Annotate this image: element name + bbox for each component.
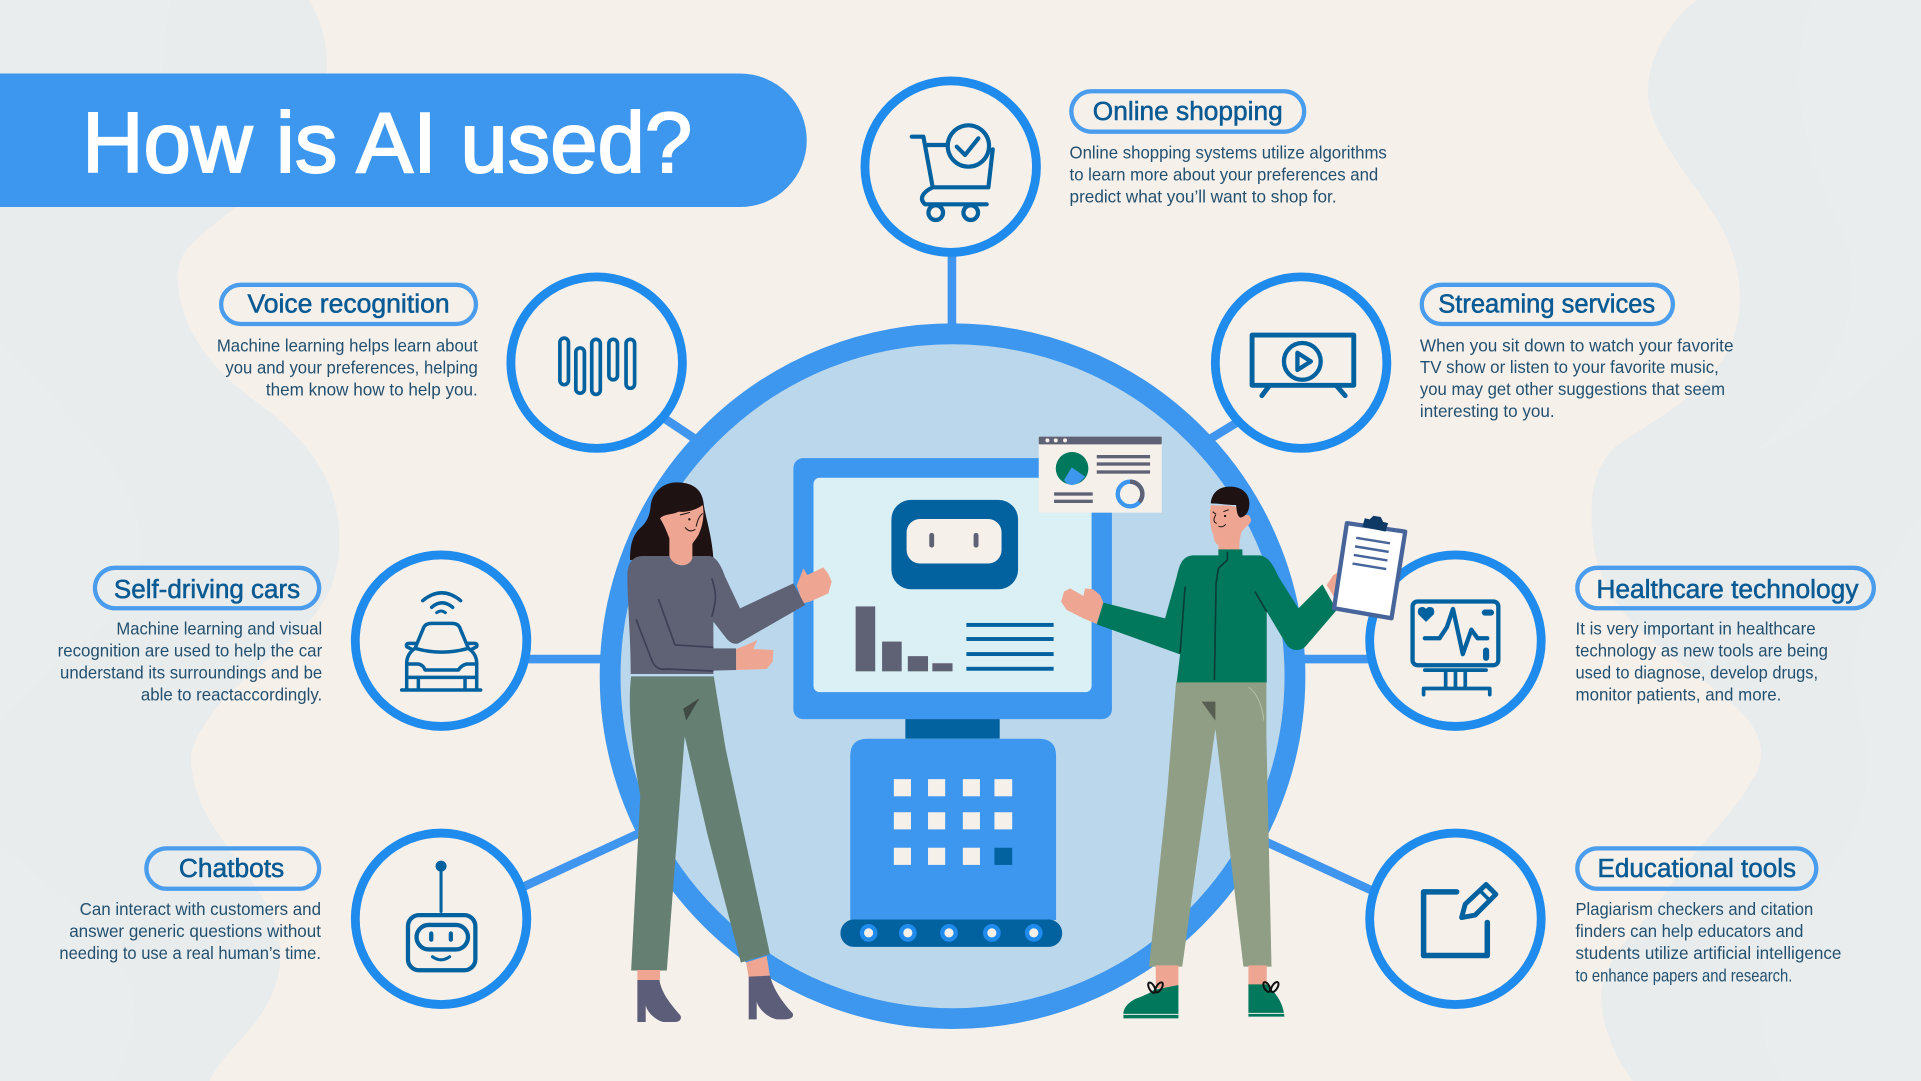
heading: voice recognition: Voice recognition (247, 290, 450, 318)
ring chart (1118, 482, 1142, 506)
text lines (966, 623, 1054, 671)
panel: online shopping (865, 81, 1387, 252)
panel: chatbots (59, 833, 527, 1005)
man upper body (1061, 487, 1343, 682)
robot face (891, 500, 1018, 589)
text: streaming services (1420, 336, 1734, 421)
text: streaming services: interesting to you. (1420, 401, 1555, 421)
heading: online shopping (1071, 91, 1304, 132)
text: online shopping: to learn more about your preferences and (1070, 165, 1378, 185)
text: self-driving cars (58, 619, 322, 705)
text: chatbots: Can interact with customers and (80, 899, 321, 919)
panel: educational tools (1370, 833, 1841, 1005)
text: voice recognition: Machine learning helps learn about (217, 336, 478, 356)
text: online shopping (1070, 143, 1387, 207)
icon: heart monitor (1370, 555, 1541, 726)
text: streaming services: When you sit down to watch your favorite (1420, 336, 1734, 356)
pie chart (1056, 452, 1088, 485)
robot (793, 458, 1112, 947)
title banner (0, 74, 807, 207)
bar chart (856, 606, 953, 671)
panel: healthcare technology (1370, 555, 1874, 726)
text: educational tools: students utilize artificial intelligence (1576, 943, 1841, 963)
heading: streaming services: Streaming services (1438, 290, 1655, 318)
central circle (610, 334, 1295, 1019)
text: streaming services: TV show or listen to your favorite music, (1420, 357, 1719, 377)
text: educational tools: finders can help educators and (1576, 921, 1803, 941)
icon: shopping cart (865, 81, 1036, 252)
man legs (1149, 682, 1272, 967)
text: healthcare technology: technology as new tools are being (1576, 641, 1828, 661)
heading: healthcare technology (1577, 568, 1874, 608)
person: man with clipboard (1061, 487, 1343, 1018)
clipboard (1334, 516, 1405, 618)
panel: streaming services (1215, 277, 1734, 448)
text: healthcare technology (1576, 619, 1828, 705)
text: chatbots (59, 899, 321, 963)
icon: tv with play button (1215, 277, 1387, 448)
heading: healthcare technology: Healthcare technology (1596, 576, 1859, 604)
text: streaming services: you may get other suggestions that seem (1420, 379, 1725, 399)
title: How is AI used? (82, 95, 692, 191)
icon: note and pencil (1370, 833, 1541, 1005)
heading: voice recognition (221, 285, 476, 324)
heading: self-driving cars (95, 568, 319, 608)
text: healthcare technology: It is very important in healthcare (1576, 619, 1816, 639)
icon: sound wave (511, 277, 682, 448)
floating dashboard card (1039, 437, 1162, 513)
heading: educational tools (1577, 848, 1816, 889)
text: healthcare technology: monitor patients, and more. (1576, 685, 1781, 705)
text: chatbots: needing to use a real human’s time. (59, 943, 321, 963)
heading: streaming services (1422, 285, 1673, 324)
woman boots (637, 956, 793, 1022)
person: woman presenting (627, 482, 832, 1022)
text: self-driving cars: understand its surroundings and be (60, 663, 322, 683)
robot monitor (793, 458, 1112, 719)
text: chatbots: answer generic questions without (69, 921, 321, 941)
text: voice recognition: them know how to help you. (266, 380, 478, 400)
text: online shopping: Online shopping systems utilize algorithms (1070, 143, 1387, 163)
man shoes (1123, 965, 1284, 1018)
text: healthcare technology: used to diagnose, develop drugs, (1576, 663, 1818, 683)
text: educational tools: to enhance papers and research. (1576, 965, 1792, 985)
text: voice recognition (217, 336, 478, 400)
icon: connected car (355, 555, 527, 726)
icon: robot head (355, 833, 527, 1005)
woman upper body (627, 482, 832, 674)
text: self-driving cars: able to reactaccordingly. (141, 685, 322, 705)
connector lines (523, 251, 1372, 891)
panel: voice recognition (217, 277, 682, 448)
robot base with keypad (850, 739, 1056, 920)
heading: online shopping: Online shopping (1093, 98, 1283, 126)
panel: self-driving cars (58, 555, 527, 726)
text: voice recognition: you and your preferences, helping (225, 358, 478, 378)
woman legs (630, 676, 770, 971)
heading: self-driving cars: Self-driving cars (114, 576, 300, 604)
heading: chatbots: Chatbots (179, 855, 284, 883)
text: online shopping: predict what you’ll want to shop for. (1070, 187, 1337, 207)
robot treads (840, 920, 1062, 947)
text: educational tools: Plagiarism checkers and citation (1576, 899, 1813, 919)
text: self-driving cars: recognition are used to help the car (58, 641, 322, 661)
text: self-driving cars: Machine learning and visual (116, 619, 322, 639)
heading: chatbots (146, 848, 319, 889)
heading: educational tools: Educational tools (1598, 855, 1796, 883)
text: educational tools (1576, 899, 1841, 985)
